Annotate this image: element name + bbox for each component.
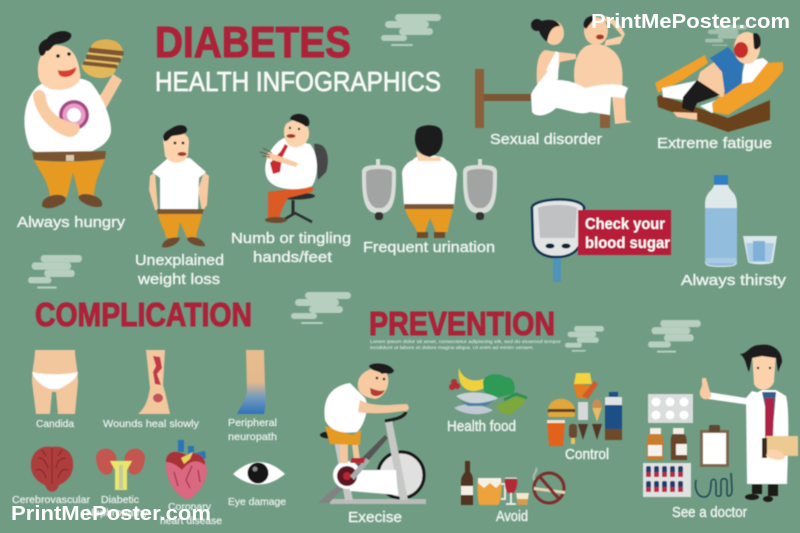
symptom: check blood sugar [532,200,671,282]
item: health food: Health food [447,418,516,435]
illustration: fat man with burger and donut [24,31,125,208]
item: wounds heal slowly [103,350,200,430]
item: eye damage: Eye damage [228,496,286,508]
callout: check your blood sugar: Check your [585,216,665,233]
item: candida [32,350,78,430]
callout: check your blood sugar: blood sugar [585,235,670,252]
label: always thirsty: Always thirsty [681,272,787,289]
callout: check your blood sugar [578,210,671,255]
label: unexplained weight loss: Unexplained [135,252,224,269]
stethoscope [695,473,732,497]
item: avoid [461,461,565,525]
symptom: sexual disorder [475,16,632,148]
panel: prevention [318,305,798,526]
clipboard [700,425,729,467]
item: diabetic nephropathy: Diabetic [101,494,139,506]
item: peripheral neuropathy: neuropath [228,431,277,443]
item: cerebrovascular disease: Cerebrovascular [12,494,90,506]
symptom: extreme fatigue [655,32,783,152]
body text: lorem ipsum: Lorem ipsum dolor sit amet, consectetur adipiscing elit, sed do eiusmod tempor [370,339,562,344]
decorative clouds [28,14,747,353]
illustration: couple on bed [475,16,632,128]
pill blister pack [648,394,693,423]
label: extreme fatigue: Extreme fatigue [657,135,772,152]
item: diabetic nephropathy [86,449,149,519]
body text: lorem ipsum [370,339,562,350]
title: diabetes: DIABETES [155,18,351,67]
body text: lorem ipsum: incididunt ut labore et dolore magna aliqua. Ut enim ad minim veniam. [370,345,534,350]
item: exercise bike: Execise [348,509,402,526]
item: peripheral neuropathy [228,350,277,443]
label: numb or tingling hands/feet [231,230,351,266]
illustration: seated man with tingling hand [260,114,328,223]
label: unexplained weight loss: weight loss [137,271,220,288]
symptom: unexplained weight loss [135,125,224,288]
label: sexual disorder: Sexual disorder [490,131,602,148]
heading: complication: COMPLICATION [35,296,252,333]
item: control: Control [565,446,609,463]
item: coronary heart disease [160,440,222,527]
item: coronary heart disease: heart disease [160,515,222,527]
heading: prevention: PREVENTION [369,305,555,342]
item: candida: Candida [36,418,74,430]
item: wounds heal slowly: Wounds heal slowly [103,418,200,430]
panel: complication [12,296,286,527]
title: health infographics: HEALTH INFOGRAPHICS [155,66,441,97]
item: cerebrovascular disease [12,447,90,506]
illustration: urinals and man from behind [362,125,497,238]
icon: water bottle and glass [705,175,777,267]
item: peripheral neuropathy: Peripheral [228,417,277,429]
title [155,18,441,97]
watermark: top: PrintMePoster.com [591,11,790,33]
capsule strip [643,463,691,497]
item: see a doctor [643,345,798,521]
item: health food [447,368,527,435]
label: see a doctor: See a doctor [672,504,747,521]
label: frequent urination: Frequent urination [363,239,495,256]
label: always hungry: Always hungry [17,214,126,231]
symptom: frequent urination [362,125,497,256]
symptom: always hungry [17,31,126,231]
icon: glucose meter [532,200,584,282]
item: coronary heart disease: Coronary [168,501,212,513]
illustration: man slumped on sofa [655,32,783,132]
doctor [700,345,798,502]
watermark: bottom: PrintMePoster.com [11,503,211,525]
illustration: thin man with loose pants [149,125,209,247]
medicine bottles [647,428,687,460]
item: avoid: Avoid [496,508,528,525]
label: numb or tingling hands/feet: hands/feet [253,249,333,266]
item: control [547,373,622,463]
symptom: numb or tingling [231,114,351,266]
label: unexplained weight loss [135,252,224,288]
item: exercise bike [318,363,426,526]
symptom: always thirsty [681,175,787,289]
item: diabetic nephropathy: Nephropathy [86,507,149,519]
item: eye damage [228,462,286,508]
label: numb or tingling hands/feet: Numb or tingling [231,230,351,247]
